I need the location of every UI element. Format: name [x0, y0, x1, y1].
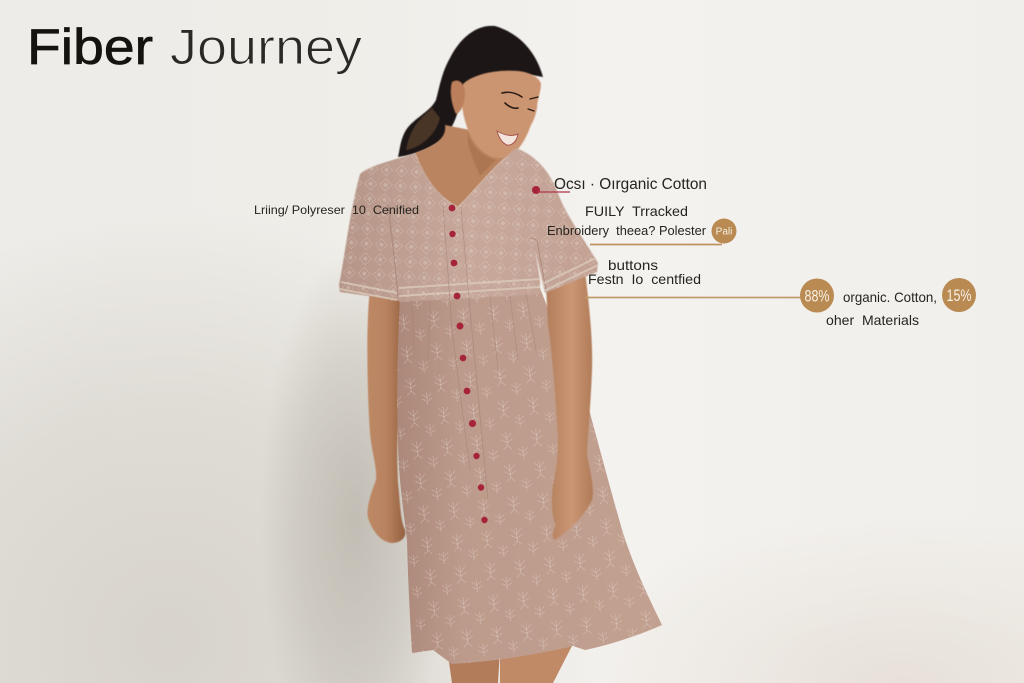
ear	[451, 80, 465, 114]
waistband and sleeve trims	[340, 258, 598, 300]
callout: fully tracked: FUILY Trracked	[585, 203, 688, 219]
title	[27, 19, 362, 75]
callout: buttons	[588, 257, 701, 287]
callout: embroidery thread: Enbroidery theea? Polester	[547, 224, 706, 238]
eyes and brows	[502, 92, 538, 111]
buttons	[449, 205, 488, 523]
callout: buttons: buttons	[608, 257, 658, 273]
callout: lining polyester: Lriing/ Polyreser 10 Cenified	[254, 203, 419, 217]
face	[462, 71, 541, 158]
callout: organic cotton: Ocsı · Oırganic Cotton	[554, 176, 707, 193]
callout: composition: oher Materials	[826, 312, 919, 328]
legs	[448, 640, 575, 683]
dress bodice and sleeves	[339, 148, 598, 302]
title: Journey	[170, 19, 362, 75]
skirt gathers	[412, 293, 536, 370]
callout: composition	[585, 278, 976, 328]
title: Fiber	[27, 19, 153, 75]
callout: embroidery thread: Pali	[716, 226, 732, 238]
right arm and hand	[546, 272, 593, 540]
left arm and hand	[367, 290, 405, 543]
callout: composition: organic. Cotton,	[843, 289, 937, 305]
neck and chest	[415, 125, 516, 207]
figure: woman in dress	[339, 26, 662, 683]
callout: composition: 15%	[946, 286, 972, 305]
skirt pattern	[397, 288, 662, 664]
placket	[443, 204, 488, 500]
callout: embroidery thread	[547, 218, 736, 244]
hair	[398, 26, 543, 157]
bodice pattern	[339, 148, 598, 302]
armpit and sleeve folds	[388, 205, 546, 296]
dress skirt	[397, 288, 662, 664]
callout: composition: 88%	[804, 286, 830, 306]
neck shadow	[468, 133, 496, 176]
ponytail highlight	[406, 108, 440, 150]
smile	[497, 131, 518, 145]
callout: buttons: Festn Io centfied	[588, 271, 701, 287]
